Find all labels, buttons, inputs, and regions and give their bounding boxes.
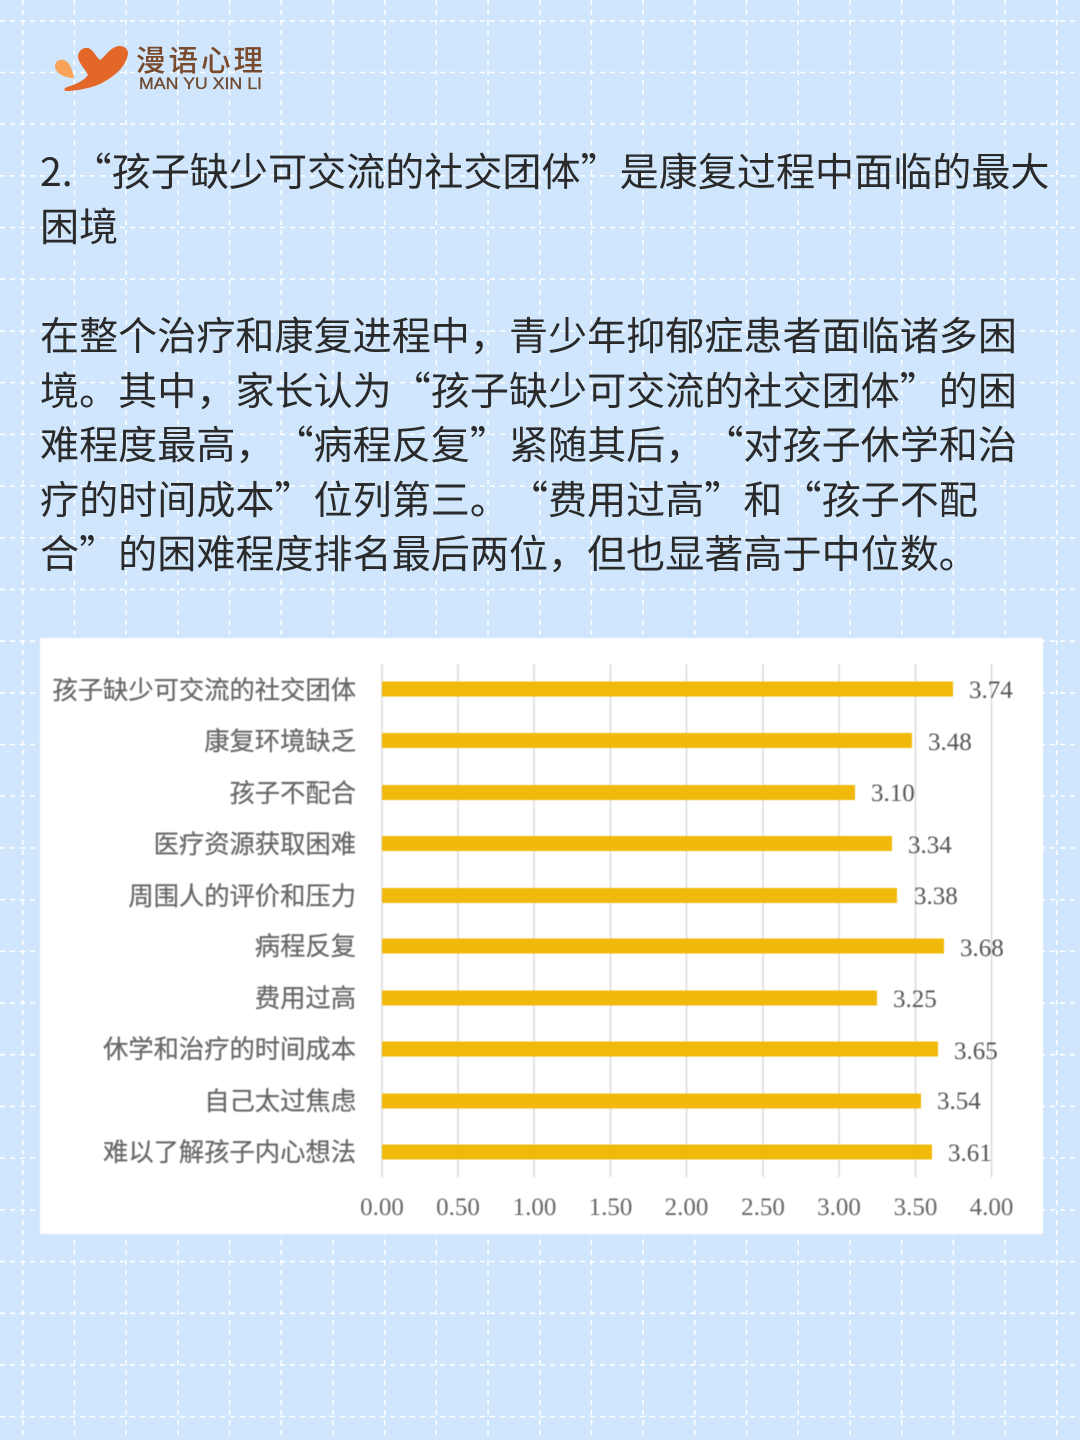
x axis labels: 1.00 [513, 1194, 556, 1221]
value labels: 3.34 [908, 832, 952, 859]
body paragraph: 合”的困难程度排名最后两位，但也显著高于中位数。 [40, 524, 978, 580]
category labels [52, 671, 356, 1169]
value labels: 3.65 [954, 1038, 998, 1065]
value labels: 3.10 [871, 780, 915, 807]
body paragraph: 在整个治疗和康复进程中，青少年抑郁症患者面临诸多困 [40, 306, 1017, 362]
value labels: 3.25 [893, 986, 937, 1013]
x axis labels: 0.00 [360, 1194, 404, 1221]
category labels: 周围人的评价和压力 [128, 877, 356, 913]
value labels [871, 677, 1013, 1167]
body paragraph: 难程度最高，“病程反复”紧随其后，“对孩子休学和治 [40, 415, 1017, 471]
x axis labels [360, 1194, 1013, 1221]
x axis labels: 2.50 [741, 1194, 785, 1221]
value labels: 3.54 [937, 1088, 981, 1115]
logo pinyin: MAN YU XIN LI [139, 75, 262, 93]
category labels: 病程反复 [255, 927, 356, 963]
category labels: 自己太过焦虑 [204, 1082, 356, 1118]
heading: 2.“孩子缺少可交流的社交团体”是康复过程中面临的最大 [40, 142, 1050, 198]
x axis labels: 3.50 [894, 1194, 937, 1221]
x axis labels: 0.50 [436, 1194, 480, 1221]
category labels: 休学和治疗的时间成本 [103, 1030, 356, 1066]
logo [55, 40, 266, 93]
bars [382, 682, 953, 1160]
x axis labels: 4.00 [970, 1194, 1013, 1221]
value labels: 3.61 [948, 1140, 992, 1167]
value labels: 3.68 [960, 935, 1004, 962]
value labels: 3.48 [928, 729, 972, 756]
category labels: 孩子缺少可交流的社交团体 [52, 671, 356, 707]
body paragraph: 境。其中，家长认为“孩子缺少可交流的社交团体”的困 [40, 361, 1017, 417]
heading: 困境 [40, 197, 118, 253]
value labels: 3.74 [969, 677, 1013, 704]
x axis labels: 2.00 [665, 1194, 708, 1221]
text block [40, 142, 1050, 580]
x axis labels: 3.00 [817, 1194, 861, 1221]
body paragraph [40, 306, 1017, 580]
value labels: 3.38 [914, 883, 958, 910]
heading [40, 142, 1050, 253]
category labels: 孩子不配合 [230, 774, 356, 810]
icon: orange heart swoosh [64, 46, 128, 91]
panel: bar chart [40, 638, 1044, 1234]
body paragraph: 疗的时间成本”位列第三。“费用过高”和“孩子不配 [40, 470, 978, 526]
category labels: 费用过高 [255, 979, 356, 1015]
category labels: 难以了解孩子内心想法 [103, 1133, 356, 1169]
x axis labels: 1.50 [589, 1194, 632, 1221]
category labels: 康复环境缺乏 [204, 722, 356, 758]
category labels: 医疗资源获取困难 [154, 825, 356, 861]
icon: orange droplet [55, 60, 74, 78]
